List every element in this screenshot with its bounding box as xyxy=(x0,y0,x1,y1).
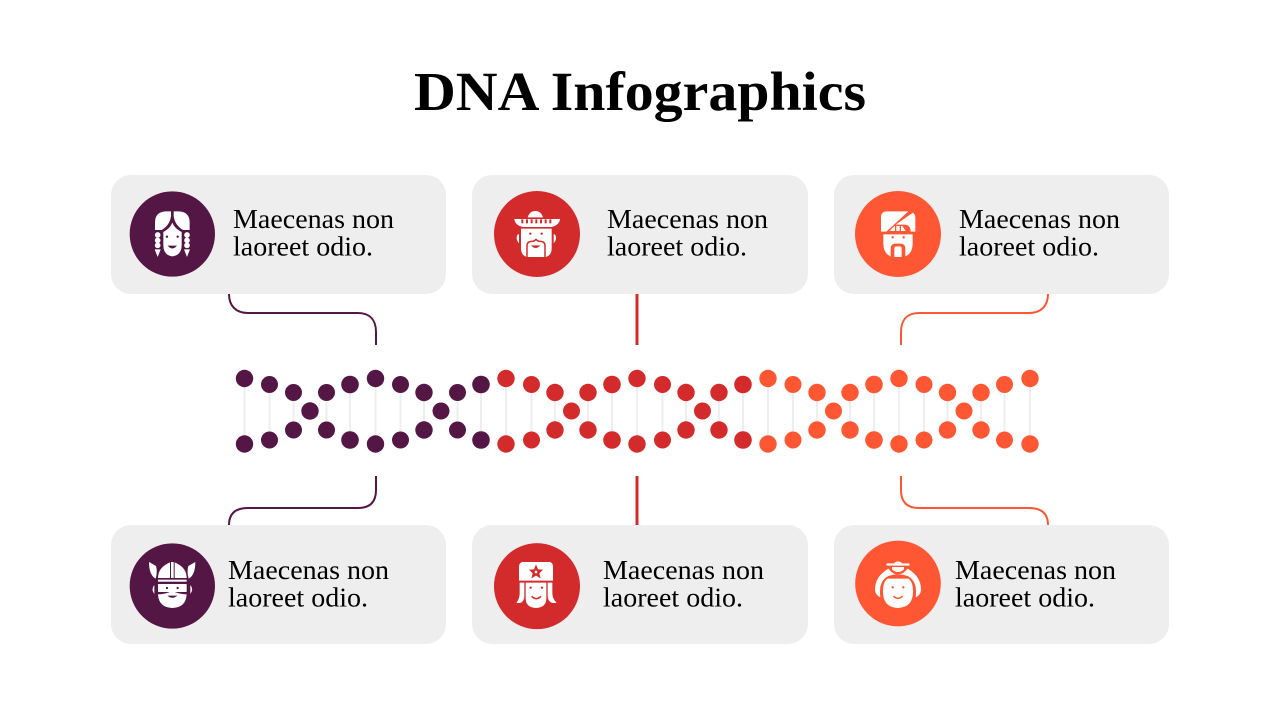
text: top right: Maecenas non xyxy=(959,204,1121,234)
text: bottom left xyxy=(228,555,390,612)
text: top center: Maecenas non xyxy=(607,204,769,234)
icon: man with turban xyxy=(855,191,941,277)
title: DNA Infographics xyxy=(414,61,866,122)
text: top right xyxy=(959,204,1121,262)
panel: top left xyxy=(111,175,446,294)
text: top center xyxy=(607,204,769,262)
text: top left: Maecenas non xyxy=(233,204,395,234)
connector: top left xyxy=(229,294,376,345)
panel: top right xyxy=(834,175,1169,294)
text: top center: laoreet odio. xyxy=(607,232,747,262)
text: bottom right: laoreet odio. xyxy=(955,582,1095,612)
text: bottom left: Maecenas non xyxy=(228,555,390,585)
connector: bottom right xyxy=(901,476,1048,525)
text: top left: laoreet odio. xyxy=(233,232,373,262)
icon: woman with ushanka xyxy=(494,543,580,629)
connector: bottom center xyxy=(636,476,638,525)
icon: viking xyxy=(130,543,215,629)
helix rungs xyxy=(244,379,1030,444)
helix dots: red xyxy=(497,370,752,453)
text: top left xyxy=(233,204,395,262)
text: bottom center: laoreet odio. xyxy=(603,582,743,612)
text: bottom right xyxy=(955,555,1117,612)
helix dots: orange xyxy=(759,370,1039,453)
icon: girl with braids xyxy=(130,191,215,277)
text: bottom center: Maecenas non xyxy=(603,555,765,585)
connector: top right xyxy=(901,294,1048,345)
text: bottom center xyxy=(603,555,765,612)
text: bottom left: laoreet odio. xyxy=(228,582,368,612)
text: top right: laoreet odio. xyxy=(959,232,1099,262)
panel: top center xyxy=(472,175,808,294)
icon: girl with propeller headpiece xyxy=(855,541,941,626)
text: bottom right: Maecenas non xyxy=(955,555,1117,585)
panel: bottom left xyxy=(111,525,446,644)
panel: bottom right xyxy=(834,525,1169,644)
panel: bottom center xyxy=(472,525,808,644)
connector: top center xyxy=(636,294,638,345)
helix dots: purple xyxy=(236,370,490,453)
connector: bottom left xyxy=(229,476,376,525)
DNA helix xyxy=(236,370,1039,453)
icon: man with sombrero xyxy=(494,191,580,277)
